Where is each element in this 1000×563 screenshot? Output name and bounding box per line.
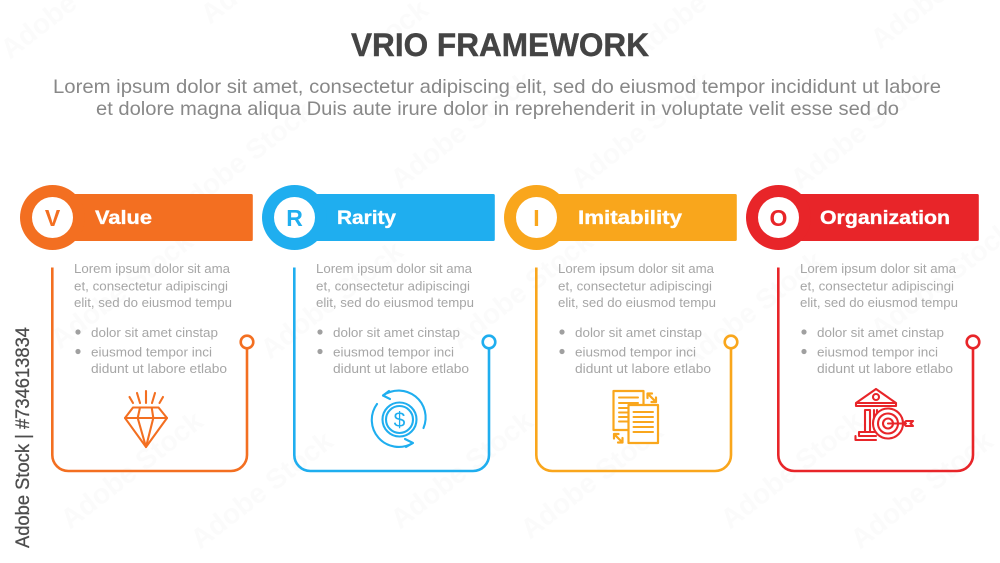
bullet list: imitability: eiusmod tempor inci <box>575 344 696 360</box>
text: Adobe Stock <box>165 95 319 225</box>
bullet list: imitability <box>559 325 711 376</box>
outline frame: imitability <box>536 268 731 471</box>
panel: imitability <box>504 185 737 471</box>
text: Adobe Stock <box>385 65 539 195</box>
header: imitability: Imitability <box>578 208 683 229</box>
text: Adobe Stock <box>515 415 669 545</box>
title: VRIO FRAMEWORK <box>351 27 649 63</box>
outline frame: organization <box>778 268 973 471</box>
description: value: et, consectetur adipiscingi <box>74 278 228 294</box>
description: organization <box>800 261 958 310</box>
description: rarity: Lorem ipsum dolor sit ama <box>316 261 473 276</box>
description: imitability: et, consectetur adipiscingi <box>558 278 712 294</box>
text: Adobe Stock <box>55 405 209 535</box>
text: Adobe Stock <box>385 405 539 535</box>
icon: bank with target <box>856 389 913 440</box>
icon: copied documents <box>614 391 658 443</box>
watermark: adobe stock id: Adobe Stock | #734613834 <box>12 327 34 548</box>
text: Adobe Stock <box>715 405 869 535</box>
description: organization: elit, sed do eiusmod tempu <box>800 295 958 310</box>
header: rarity <box>262 185 495 250</box>
description: rarity <box>316 261 474 310</box>
panel: organization <box>746 185 979 471</box>
bullet list: value: dolor sit amet cinstap <box>91 325 218 340</box>
icon: coin with circular arrows <box>372 391 426 447</box>
connector dot: rarity <box>483 336 495 348</box>
panel: rarity <box>262 185 495 471</box>
text: Adobe Stock <box>45 225 199 355</box>
description: imitability: Lorem ipsum dolor sit ama <box>558 261 715 276</box>
bullet list: rarity <box>317 325 469 376</box>
description: imitability <box>558 261 716 310</box>
description: value: elit, sed do eiusmod tempu <box>74 295 232 310</box>
description: value <box>74 261 232 310</box>
header: value <box>20 185 253 250</box>
text: Adobe Stock <box>565 65 719 195</box>
bullet list: rarity: dolor sit amet cinstap <box>333 325 460 340</box>
outline frame: rarity <box>294 268 489 471</box>
subtitle text: Lorem ipsum dolor sit amet, consectetur adipiscing elit, sed do eiusmod tempor incididunt ut labore <box>53 76 941 98</box>
bullet list: organization <box>801 325 953 376</box>
connector dot: imitability <box>725 336 737 348</box>
icon: diamond <box>125 391 167 447</box>
header: organization: Organization <box>820 208 950 229</box>
bullet list: value: eiusmod tempor inci <box>91 344 212 360</box>
text: Adobe Stock <box>255 235 409 365</box>
bullet list: imitability: didunt ut labore etlabo <box>575 361 711 376</box>
header: value: Value <box>95 208 152 229</box>
description: value: Lorem ipsum dolor sit ama <box>74 261 231 276</box>
header: rarity: Rarity <box>337 208 396 229</box>
icon: coin with circular arrows: $ <box>394 409 406 432</box>
header: organization <box>746 185 979 250</box>
subtitle text <box>53 76 941 120</box>
panel: value <box>20 185 253 471</box>
bullet list: organization: dolor sit amet cinstap <box>817 325 944 340</box>
outline frame: value <box>52 268 247 471</box>
subtitle text: et dolore magna aliqua Duis aute irure dolor in reprehenderit in voluptate velit esse sed do <box>96 98 899 120</box>
connector dot: value <box>241 336 253 348</box>
description: imitability: elit, sed do eiusmod tempu <box>558 295 716 310</box>
description: organization: et, consectetur adipiscingi <box>800 278 954 294</box>
bullet list: organization: didunt ut labore etlabo <box>817 361 953 376</box>
description: rarity: et, consectetur adipiscingi <box>316 278 470 294</box>
bullet list: rarity: didunt ut labore etlabo <box>333 361 469 376</box>
header: imitability <box>504 185 737 250</box>
bullet list: organization: eiusmod tempor inci <box>817 344 938 360</box>
text: Adobe Stock <box>845 425 999 555</box>
bullet list: value <box>75 325 227 376</box>
text: Adobe Stock <box>185 425 339 555</box>
text: Adobe Stock <box>445 225 599 355</box>
bullet list: imitability: dolor sit amet cinstap <box>575 325 702 340</box>
text: Adobe Stock <box>785 65 939 195</box>
bullet list: rarity: eiusmod tempor inci <box>333 344 454 360</box>
connector dot: organization <box>967 336 979 348</box>
description: rarity: elit, sed do eiusmod tempu <box>316 295 474 310</box>
header: rarity: R <box>286 205 303 231</box>
header: imitability: I <box>533 205 540 231</box>
text: Adobe Stock <box>675 245 829 375</box>
header: value: V <box>45 205 61 231</box>
header: organization: O <box>770 205 787 231</box>
description: organization: Lorem ipsum dolor sit ama <box>800 261 957 276</box>
bullet list: value: didunt ut labore etlabo <box>91 361 227 376</box>
